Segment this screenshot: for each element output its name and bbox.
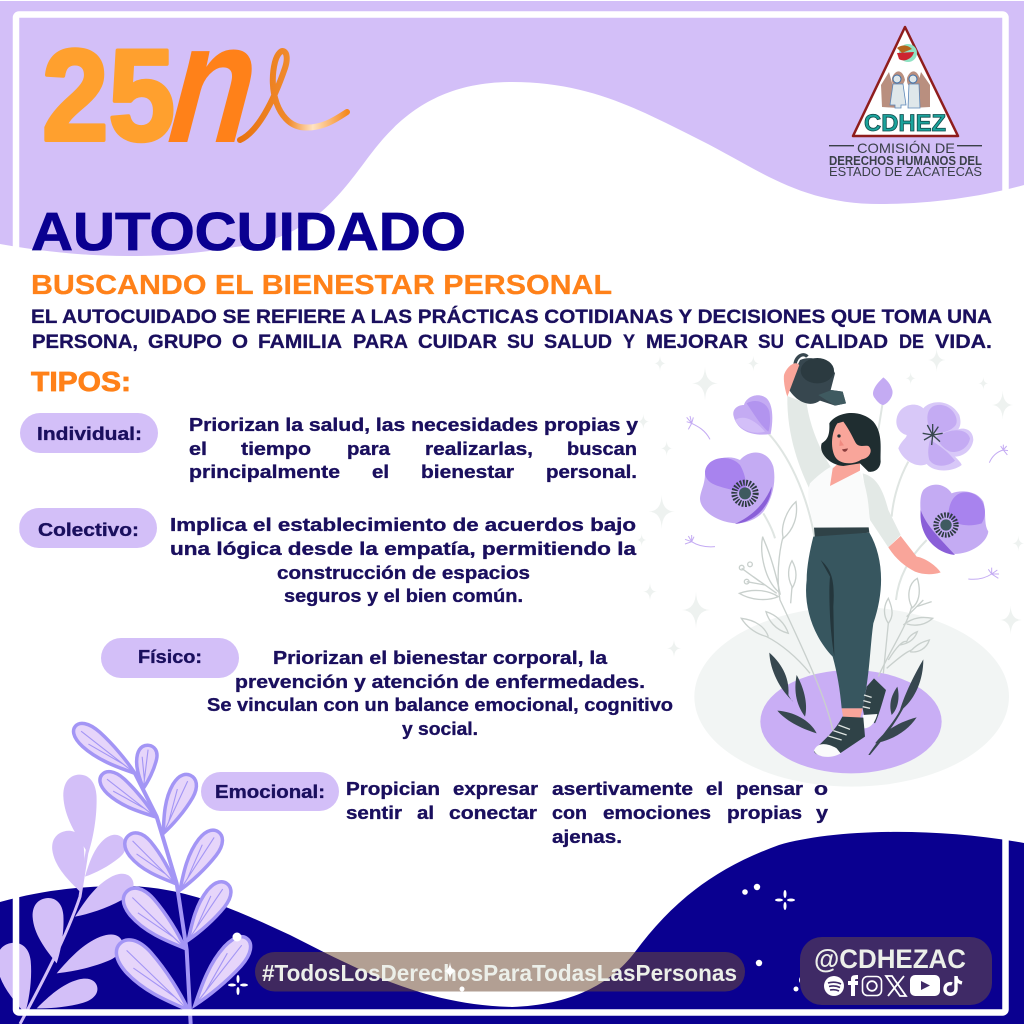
text: colectivo: seguros y el bien común.: [284, 586, 523, 606]
woman: face: [832, 422, 871, 463]
logo name: [829, 140, 982, 179]
text: emocional: o: [814, 779, 828, 799]
text: emocional: emociones: [603, 803, 711, 823]
icon: youtube: [910, 975, 940, 996]
text: individual: realizarlas,: [425, 439, 533, 459]
flower top right pale: [896, 402, 973, 471]
ground ellipse: [694, 607, 1009, 787]
woman: pants: [806, 533, 881, 708]
CDHEZ institutional logo: [829, 27, 982, 179]
social media pill: [800, 937, 992, 1005]
text: fisico: y social.: [402, 719, 478, 739]
text: individual: bienestar: [421, 462, 514, 482]
text: emocional: y: [816, 803, 828, 823]
intro paragraph: EL AUTOCUIDADO SE REFIERE A LAS PRÁCTICAS COTIDIANAS Y DECISIONES QUE TOMA UNA: [31, 305, 992, 328]
plant decoration bottom left: [0, 718, 257, 1024]
intro paragraph: SU: [758, 331, 784, 353]
flower bud left: [733, 395, 772, 435]
pill: colectivo: [19, 508, 157, 548]
intro paragraph: MEJORAR: [646, 331, 748, 353]
logo hands and figures: [881, 71, 930, 108]
icon: X: [886, 976, 906, 996]
text: colectivo: una lógica desde la empatía, permitiendo la: [170, 539, 637, 559]
woman: right sleeve: [863, 473, 901, 547]
text: emocional: sentir: [346, 803, 402, 823]
heading: tipos: TIPOS:: [31, 366, 131, 397]
woman: front shoe: [814, 717, 865, 757]
purple ground ellipse: [760, 670, 942, 773]
intro paragraph: [31, 305, 992, 353]
intro paragraph: PARA: [353, 331, 408, 353]
text: individual: el: [372, 462, 389, 482]
logo sun emblem: [897, 44, 917, 62]
pill: individual: [20, 413, 158, 453]
hashtag pill: [255, 952, 745, 992]
logo name: COMISIÓN DE: [857, 140, 955, 156]
pill: emocional: Emocional:: [215, 782, 325, 802]
type: colectivo: [19, 508, 637, 606]
intro paragraph: Y: [623, 331, 635, 353]
text: emocional: Propician: [346, 779, 440, 799]
orange ribbon: [240, 51, 347, 140]
illustration: woman watering flowers: [637, 348, 1024, 787]
text: emocional: expresar: [453, 779, 538, 799]
text: individual: tiempo: [241, 439, 311, 459]
text: emocional: conectar: [449, 803, 537, 823]
subtitle: BUSCANDO EL BIENESTAR PERSONAL: [31, 269, 612, 300]
icon: tiktok: [945, 976, 962, 994]
background: lavender top wave: [0, 1, 1024, 256]
woman: neck and chest: [830, 458, 860, 486]
text: fisico: Se vinculan con un balance emocional, cognitivo: [207, 695, 673, 715]
intro paragraph: O: [232, 331, 248, 353]
sparkles background: [637, 348, 1024, 658]
text: colectivo: [170, 515, 637, 606]
woman: hair: [821, 413, 881, 472]
text: emocional: propias: [727, 803, 802, 823]
text: fisico: Priorizan el bienestar corporal, la: [273, 648, 608, 668]
flower right large: [920, 485, 988, 555]
type: fisico: [101, 638, 673, 739]
dandelion seeds: [685, 416, 1008, 579]
pill: individual: Individual:: [37, 424, 142, 444]
grey line plant right: [878, 578, 933, 677]
text: individual: buscan: [567, 439, 637, 459]
flower bud small: [873, 377, 893, 405]
logo name: ESTADO DE ZACATECAS: [829, 165, 982, 179]
hashtag text: #TodosLosDerechosParaTodasLasPersonas: [262, 960, 737, 986]
text: individual: principalmente: [189, 462, 340, 482]
text: individual: el: [189, 439, 207, 459]
intro paragraph: SALUD: [544, 331, 612, 353]
background: navy bottom wave: [0, 832, 1024, 1024]
hashtag sparkle and dot: [444, 962, 464, 992]
pill: fisico: Físico:: [138, 647, 202, 667]
woman: torso: [808, 467, 869, 529]
sparkles and dots on wave: [228, 884, 809, 995]
grey line plant left: [739, 502, 833, 730]
intro paragraph: FAMILIA: [258, 331, 342, 353]
logo name: DERECHOS HUMANOS DEL: [829, 154, 982, 168]
text: emocional: pensar: [736, 779, 803, 799]
pill: colectivo: Colectivo:: [38, 520, 139, 540]
intro paragraph: VIDA.: [935, 331, 992, 353]
text: emocional: al: [417, 803, 434, 823]
veined violet branch: [68, 718, 257, 1024]
intro paragraph: DE: [899, 331, 924, 353]
woman: belt: [814, 527, 869, 539]
text: individual: Priorizan la salud, las necesidades propias y: [189, 415, 638, 435]
woman: ankle: [842, 708, 863, 718]
text: colectivo: Implica el establecimiento de acuerdos bajo: [170, 515, 636, 535]
text: emocional: con: [552, 803, 587, 823]
intro paragraph: CUIDAR: [418, 331, 497, 353]
woman: raised arm sleeve: [787, 396, 832, 493]
flower left large: [700, 452, 774, 524]
logo triangle: [853, 27, 958, 136]
text: individual: personal.: [546, 462, 637, 482]
text: emocional: ajenas.: [552, 827, 622, 847]
solid lavender branch: [0, 773, 139, 1024]
flower stems: [763, 405, 927, 600]
intro paragraph: GRUPO: [148, 331, 222, 353]
icon: spotify: [824, 976, 844, 996]
title: AUTOCUIDADO: [31, 202, 466, 262]
icon: facebook: [848, 975, 858, 996]
text: emocional: el: [706, 779, 723, 799]
woman: forearm and hand: [888, 536, 941, 574]
social handle: @CDHEZAC: [814, 944, 966, 974]
text: individual: para: [347, 439, 391, 459]
woman: back shoe: [863, 678, 886, 728]
text: colectivo: construcción de espacios: [277, 563, 530, 583]
logo wordmark CDHEZ: CDHEZ: [864, 110, 946, 137]
intro paragraph: PERSONA,: [32, 331, 138, 353]
intro paragraph: SU: [507, 331, 534, 353]
woman: hand on can: [784, 363, 799, 397]
pill: fisico: [101, 638, 239, 678]
type: emocional: [201, 772, 828, 847]
intro paragraph: CALIDAD: [795, 331, 888, 353]
25 numerals: 25: [42, 22, 175, 168]
dark leaves: [769, 653, 923, 755]
woman: watering can: [787, 355, 846, 406]
text: fisico: [207, 648, 673, 739]
pill: emocional: [201, 772, 339, 811]
text: emocional: [346, 779, 828, 847]
text: fisico: prevención y atención de enfermedades.: [235, 672, 645, 692]
25N logo: [42, 0, 347, 179]
icon: instagram: [862, 976, 882, 996]
text: emocional: asertivamente: [552, 779, 693, 799]
type: individual: [20, 413, 638, 482]
text: individual: [189, 415, 638, 482]
